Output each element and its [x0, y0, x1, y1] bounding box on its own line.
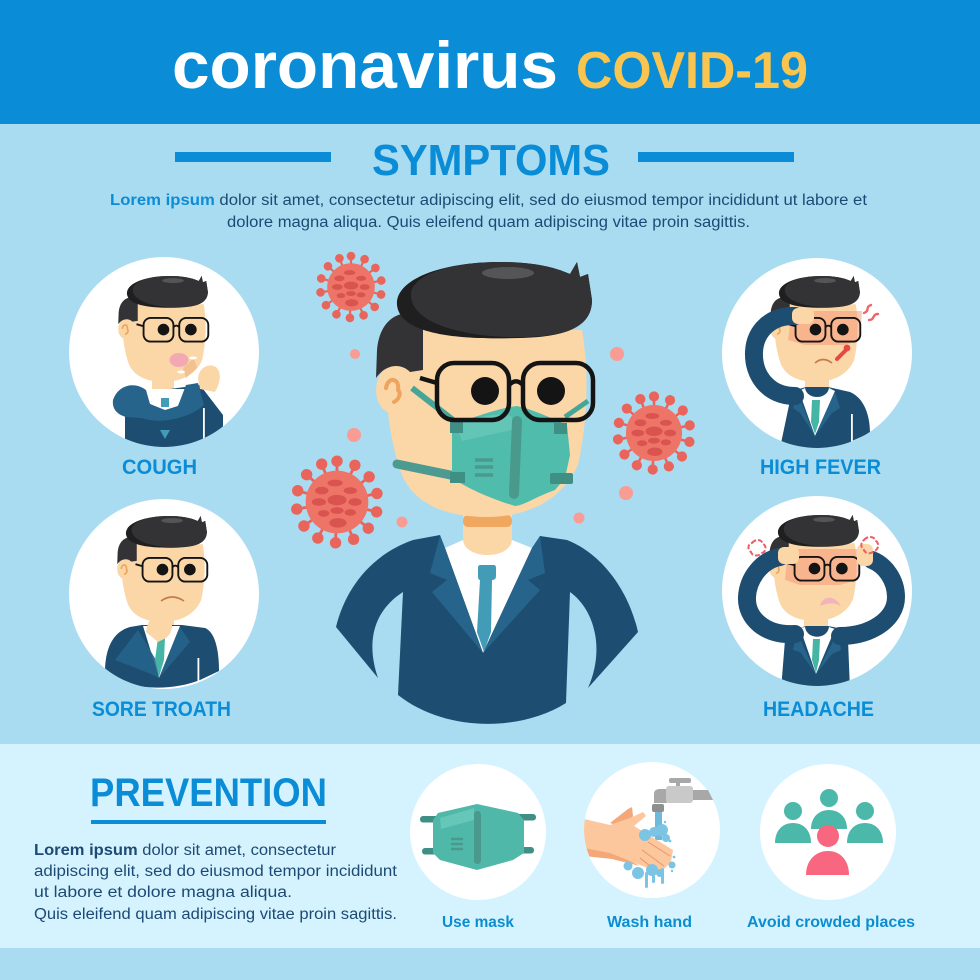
- neck: [463, 510, 512, 557]
- label: high fever: HIGH FEVER: [760, 456, 881, 479]
- prevention text: [34, 842, 398, 923]
- label: sore throat: SORE TROATH: [92, 698, 231, 721]
- label: cough: COUGH: [122, 456, 197, 479]
- icon: wash hand: [584, 762, 720, 898]
- heading: prevention: PREVENTION: [90, 771, 327, 815]
- panel: prevention: [0, 744, 980, 948]
- virus particles and droplets: [292, 253, 694, 547]
- label: wash hand: Wash hand: [607, 914, 692, 931]
- glasses: [420, 363, 593, 420]
- icon: use mask: [410, 764, 546, 900]
- cough figure: [113, 276, 223, 460]
- panel: high fever: [722, 258, 912, 448]
- icon: avoid crowded places: [760, 764, 896, 900]
- prevention text: ut labore et dolore magna aliqua.: [34, 884, 292, 901]
- header banner: [0, 0, 980, 124]
- suit: [336, 535, 638, 724]
- heading: symptoms: [175, 136, 794, 185]
- label: avoid crowded places: Avoid crowded places: [747, 914, 915, 931]
- symptoms intro text: [110, 192, 868, 231]
- prevention text: Lorem ipsum dolor sit amet, consectetur: [34, 842, 336, 859]
- symptoms intro text: dolore magna aliqua. Quis eleifend quam adipiscing vitae proin sagittis.: [227, 214, 750, 231]
- symptoms intro text: Lorem ipsum dolor sit amet, consectetur adipiscing elit, sed do eiusmod tempor incididunt ut labore et: [110, 192, 868, 209]
- sore throat figure: [105, 516, 219, 688]
- high fever figure: [754, 276, 878, 448]
- shirt: [445, 540, 532, 653]
- heading: symptoms: SYMPTOMS: [372, 136, 610, 185]
- tie: [477, 565, 496, 652]
- label: headache: HEADACHE: [763, 698, 874, 721]
- headache figure: [747, 515, 896, 690]
- prevention text: adipiscing elit, sed do eiusmod tempor incididunt: [34, 863, 398, 880]
- lapels: [430, 536, 545, 653]
- mask: [397, 388, 588, 506]
- panel: headache: [722, 496, 912, 690]
- prevention text: Quis eleifend quam adipiscing vitae proin sagittis.: [34, 906, 397, 923]
- panel: cough: [69, 257, 259, 460]
- title: coronavirus: coronavirus: [172, 28, 558, 102]
- title: COVID-19: COVID-19: [576, 42, 808, 100]
- label: use mask: Use mask: [442, 914, 514, 931]
- head: [376, 262, 592, 517]
- central figure wearing mask: [336, 262, 638, 724]
- panel: sore throat: [69, 499, 259, 689]
